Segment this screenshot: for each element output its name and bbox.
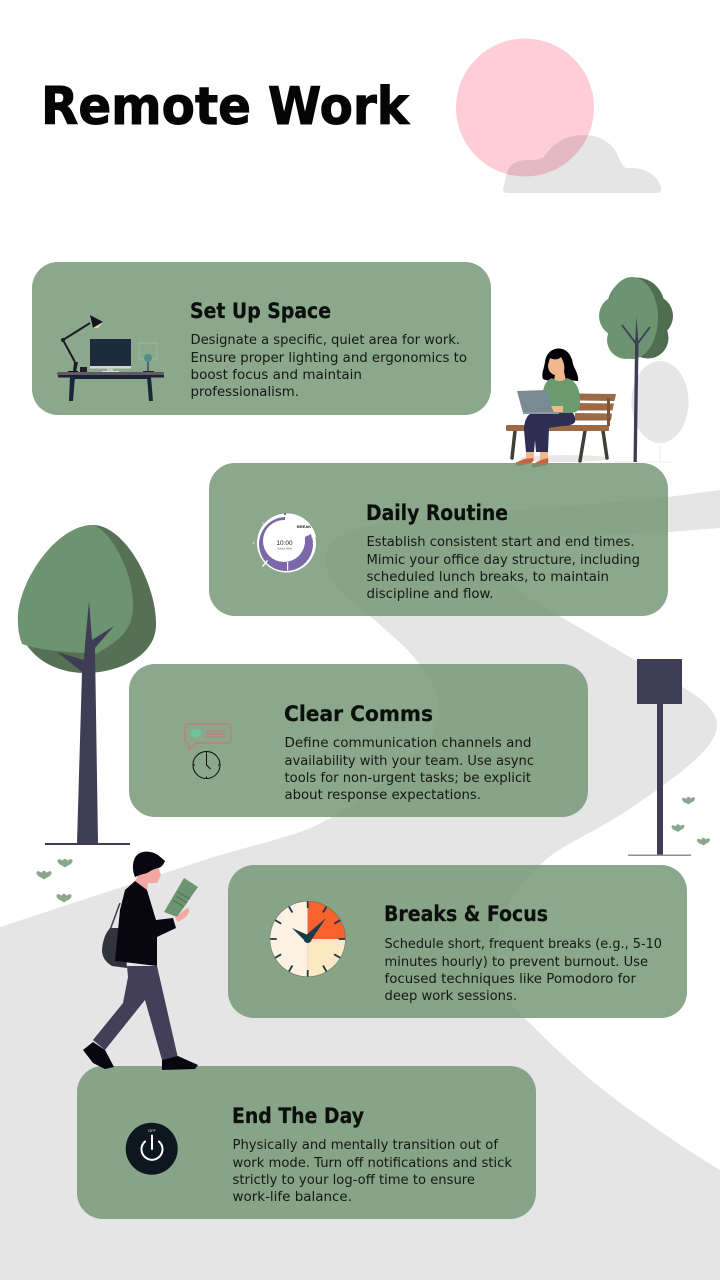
illustration: signpost	[628, 659, 691, 856]
body text	[190, 333, 467, 400]
icon: power off button	[126, 1123, 178, 1175]
title: Remote Work	[41, 77, 410, 137]
icon: pink sun	[456, 38, 594, 176]
illustration: large tree	[18, 525, 156, 845]
icon: circular routine timer: BREAK	[297, 524, 311, 529]
body text: professionalism.	[190, 385, 299, 400]
icon: circular routine timer	[252, 513, 316, 572]
heading: Breaks & Focus	[384, 902, 548, 927]
panel: Set Up Space	[32, 262, 491, 415]
icon: grey cloud	[503, 135, 661, 193]
body text: about response expectations.	[284, 788, 481, 803]
body text: Mimic your office day structure, including	[366, 553, 640, 568]
body text	[384, 937, 662, 1004]
heading: Set Up Space	[190, 299, 331, 324]
illustration: man walking and reading	[83, 852, 198, 1070]
panel: Breaks & Focus	[228, 865, 687, 1018]
panel: Daily Routine	[209, 463, 668, 616]
body text: minutes hourly) to prevent burnout. Use	[384, 955, 648, 970]
illustration: park tree by bench	[599, 277, 688, 462]
winding grey path background	[0, 490, 720, 1280]
body text	[232, 1138, 512, 1205]
body text: work mode. Turn off notifications and stick	[232, 1156, 512, 1171]
panel: End The Day	[77, 1066, 536, 1219]
panel: Clear Comms	[129, 664, 588, 817]
body text: tools for non-urgent tasks; be explicit	[284, 771, 531, 786]
body text: deep work sessions.	[384, 989, 517, 1004]
icon: pomodoro clock	[270, 901, 346, 977]
plants left	[35, 858, 74, 902]
icon: circular routine timer: Today's Work	[277, 548, 293, 550]
icon: circular routine timer: 10:00	[276, 540, 293, 547]
body text: Schedule short, frequent breaks (e.g., 5-10	[384, 937, 662, 952]
heading: Daily Routine	[366, 501, 508, 526]
plants right	[671, 796, 711, 845]
illustration: woman on bench with laptop	[506, 348, 616, 467]
body text: strictly to your log-off time to ensure	[232, 1173, 475, 1188]
icon: chat bubble and clock	[185, 724, 231, 778]
body text: boost focus and maintain	[190, 368, 362, 383]
body text: Establish consistent start and end times.	[366, 535, 634, 550]
body text: Designate a specific, quiet area for work.	[190, 333, 460, 348]
body text: work-life balance.	[232, 1190, 352, 1205]
body text: Ensure proper lighting and ergonomics to	[190, 351, 467, 366]
icon: power off button: OFF	[148, 1128, 157, 1133]
body text	[366, 535, 640, 602]
heading: Clear Comms	[284, 702, 433, 727]
body text: discipline and flow.	[366, 587, 494, 602]
icon: desk with monitor and lamp	[57, 315, 164, 401]
body text: availability with your team. Use async	[284, 754, 534, 769]
body text: focused techniques like Pomodoro for	[384, 972, 637, 987]
heading: End The Day	[232, 1104, 364, 1129]
body text: Define communication channels and	[284, 736, 532, 751]
body text	[284, 736, 534, 803]
body text: Physically and mentally transition out of	[232, 1138, 498, 1153]
body text: scheduled lunch breaks, to maintain	[366, 570, 609, 585]
